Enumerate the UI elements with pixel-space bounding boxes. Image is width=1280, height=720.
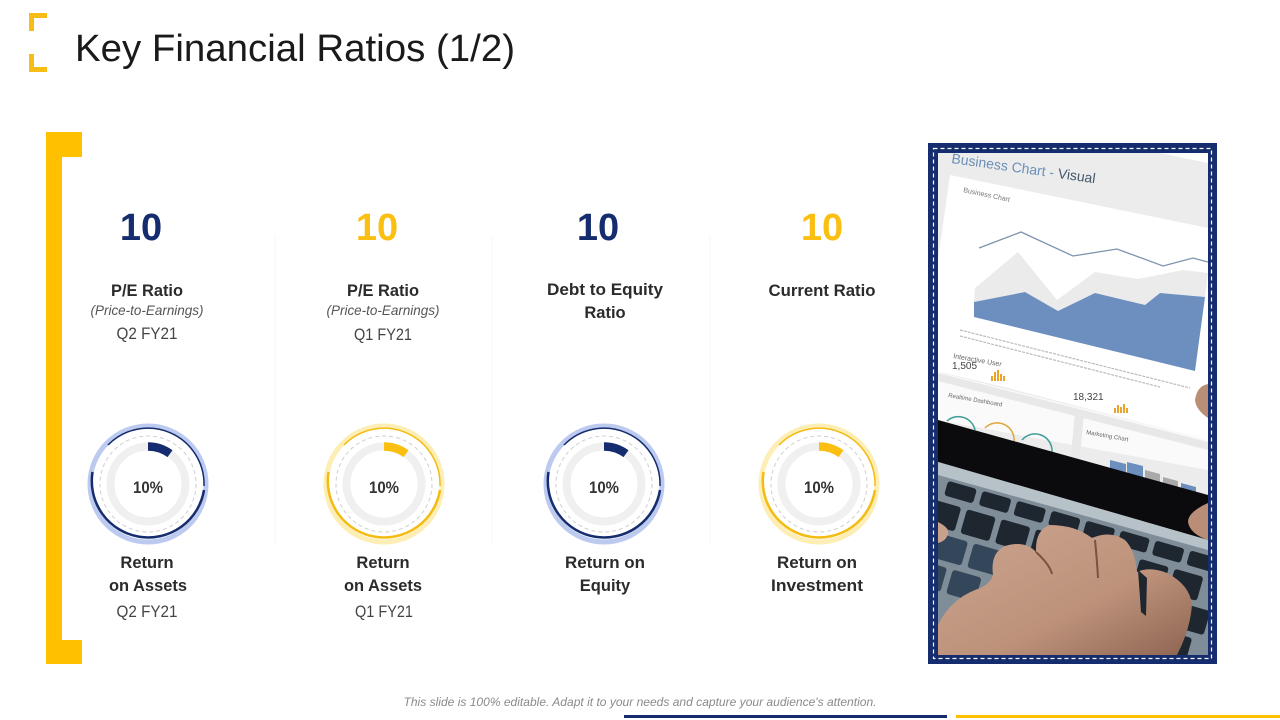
value: 10 bbox=[120, 207, 162, 249]
gauge label line 2: Investment bbox=[771, 577, 864, 595]
label: P/E Ratio bbox=[347, 282, 419, 300]
hand bbox=[938, 525, 1192, 655]
label: Debt to Equity bbox=[547, 281, 664, 299]
gauge label: Return bbox=[356, 554, 410, 572]
right fingers bbox=[1188, 503, 1208, 540]
footer note: This slide is 100% editable. Adapt it to your needs and capture your audience's attention. bbox=[404, 695, 876, 709]
label line 2: Ratio bbox=[584, 304, 626, 322]
value: 10 bbox=[801, 207, 843, 249]
photo panel: laptop with dashboard bbox=[928, 143, 1217, 664]
large yellow side bracket bbox=[46, 132, 82, 664]
footer bar yellow bbox=[956, 715, 1280, 718]
keyboard deck bbox=[938, 462, 1208, 655]
gauge period: Q2 FY21 bbox=[116, 602, 178, 621]
photo content bbox=[938, 153, 1208, 655]
gauge: 10% navy: 10% bbox=[589, 478, 619, 497]
sublabel: (Price-to-Earnings) bbox=[326, 302, 440, 318]
keys bbox=[938, 482, 1208, 655]
gauge label line 2: Equity bbox=[580, 577, 631, 595]
title bracket icon bbox=[29, 13, 47, 72]
column 1: P/E ratio Q2 bbox=[90, 207, 206, 621]
column 2: P/E ratio Q1 bbox=[326, 207, 442, 621]
gauge: 10% yellow: 10% bbox=[804, 478, 834, 497]
photo content: Marketing Chart bbox=[1086, 430, 1129, 443]
photo content: 1,505 bbox=[952, 361, 977, 372]
gauge: 10% navy bbox=[546, 426, 662, 542]
gauge: 10% navy: 10% bbox=[133, 478, 163, 497]
gauge: 10% yellow bbox=[761, 426, 877, 542]
photo content: 18,321 bbox=[1073, 392, 1104, 403]
gauge period: Q1 FY21 bbox=[355, 602, 413, 621]
navy frame bbox=[928, 143, 1217, 664]
footer bar navy bbox=[624, 715, 947, 718]
sublabel: (Price-to-Earnings) bbox=[90, 302, 204, 318]
period: Q1 FY21 bbox=[354, 325, 412, 344]
period: Q2 FY21 bbox=[116, 324, 178, 343]
title: Key Financial Ratios (1/2) bbox=[75, 28, 515, 70]
column 3: debt to equity bbox=[546, 207, 664, 595]
gauge: 10% yellow: 10% bbox=[369, 478, 399, 497]
gauge label: Return on bbox=[777, 554, 857, 572]
gauge label line 2: on Assets bbox=[344, 577, 422, 595]
column 4: current ratio bbox=[761, 207, 877, 595]
finger creases bbox=[1036, 540, 1098, 578]
left finger bbox=[938, 522, 948, 543]
photo content: Business Chart bbox=[963, 187, 1011, 204]
value: 10 bbox=[356, 207, 398, 249]
label: P/E Ratio bbox=[111, 282, 183, 300]
gauge: 10% navy bbox=[90, 426, 206, 542]
photo content: Interactive User bbox=[953, 353, 1003, 369]
gauge label: Return on bbox=[565, 554, 645, 572]
gauge: 10% yellow bbox=[326, 426, 442, 542]
photo content: Business Chart - Visual bbox=[951, 150, 1097, 186]
value: 10 bbox=[577, 207, 619, 249]
gauge label: Return bbox=[120, 554, 174, 572]
gauge label line 2: on Assets bbox=[109, 577, 187, 595]
dashed frame line bbox=[934, 148, 1212, 658]
photo content: Realtime Dashboard bbox=[948, 393, 1003, 408]
laptop bezel bbox=[938, 420, 1208, 540]
label: Current Ratio bbox=[768, 282, 876, 300]
